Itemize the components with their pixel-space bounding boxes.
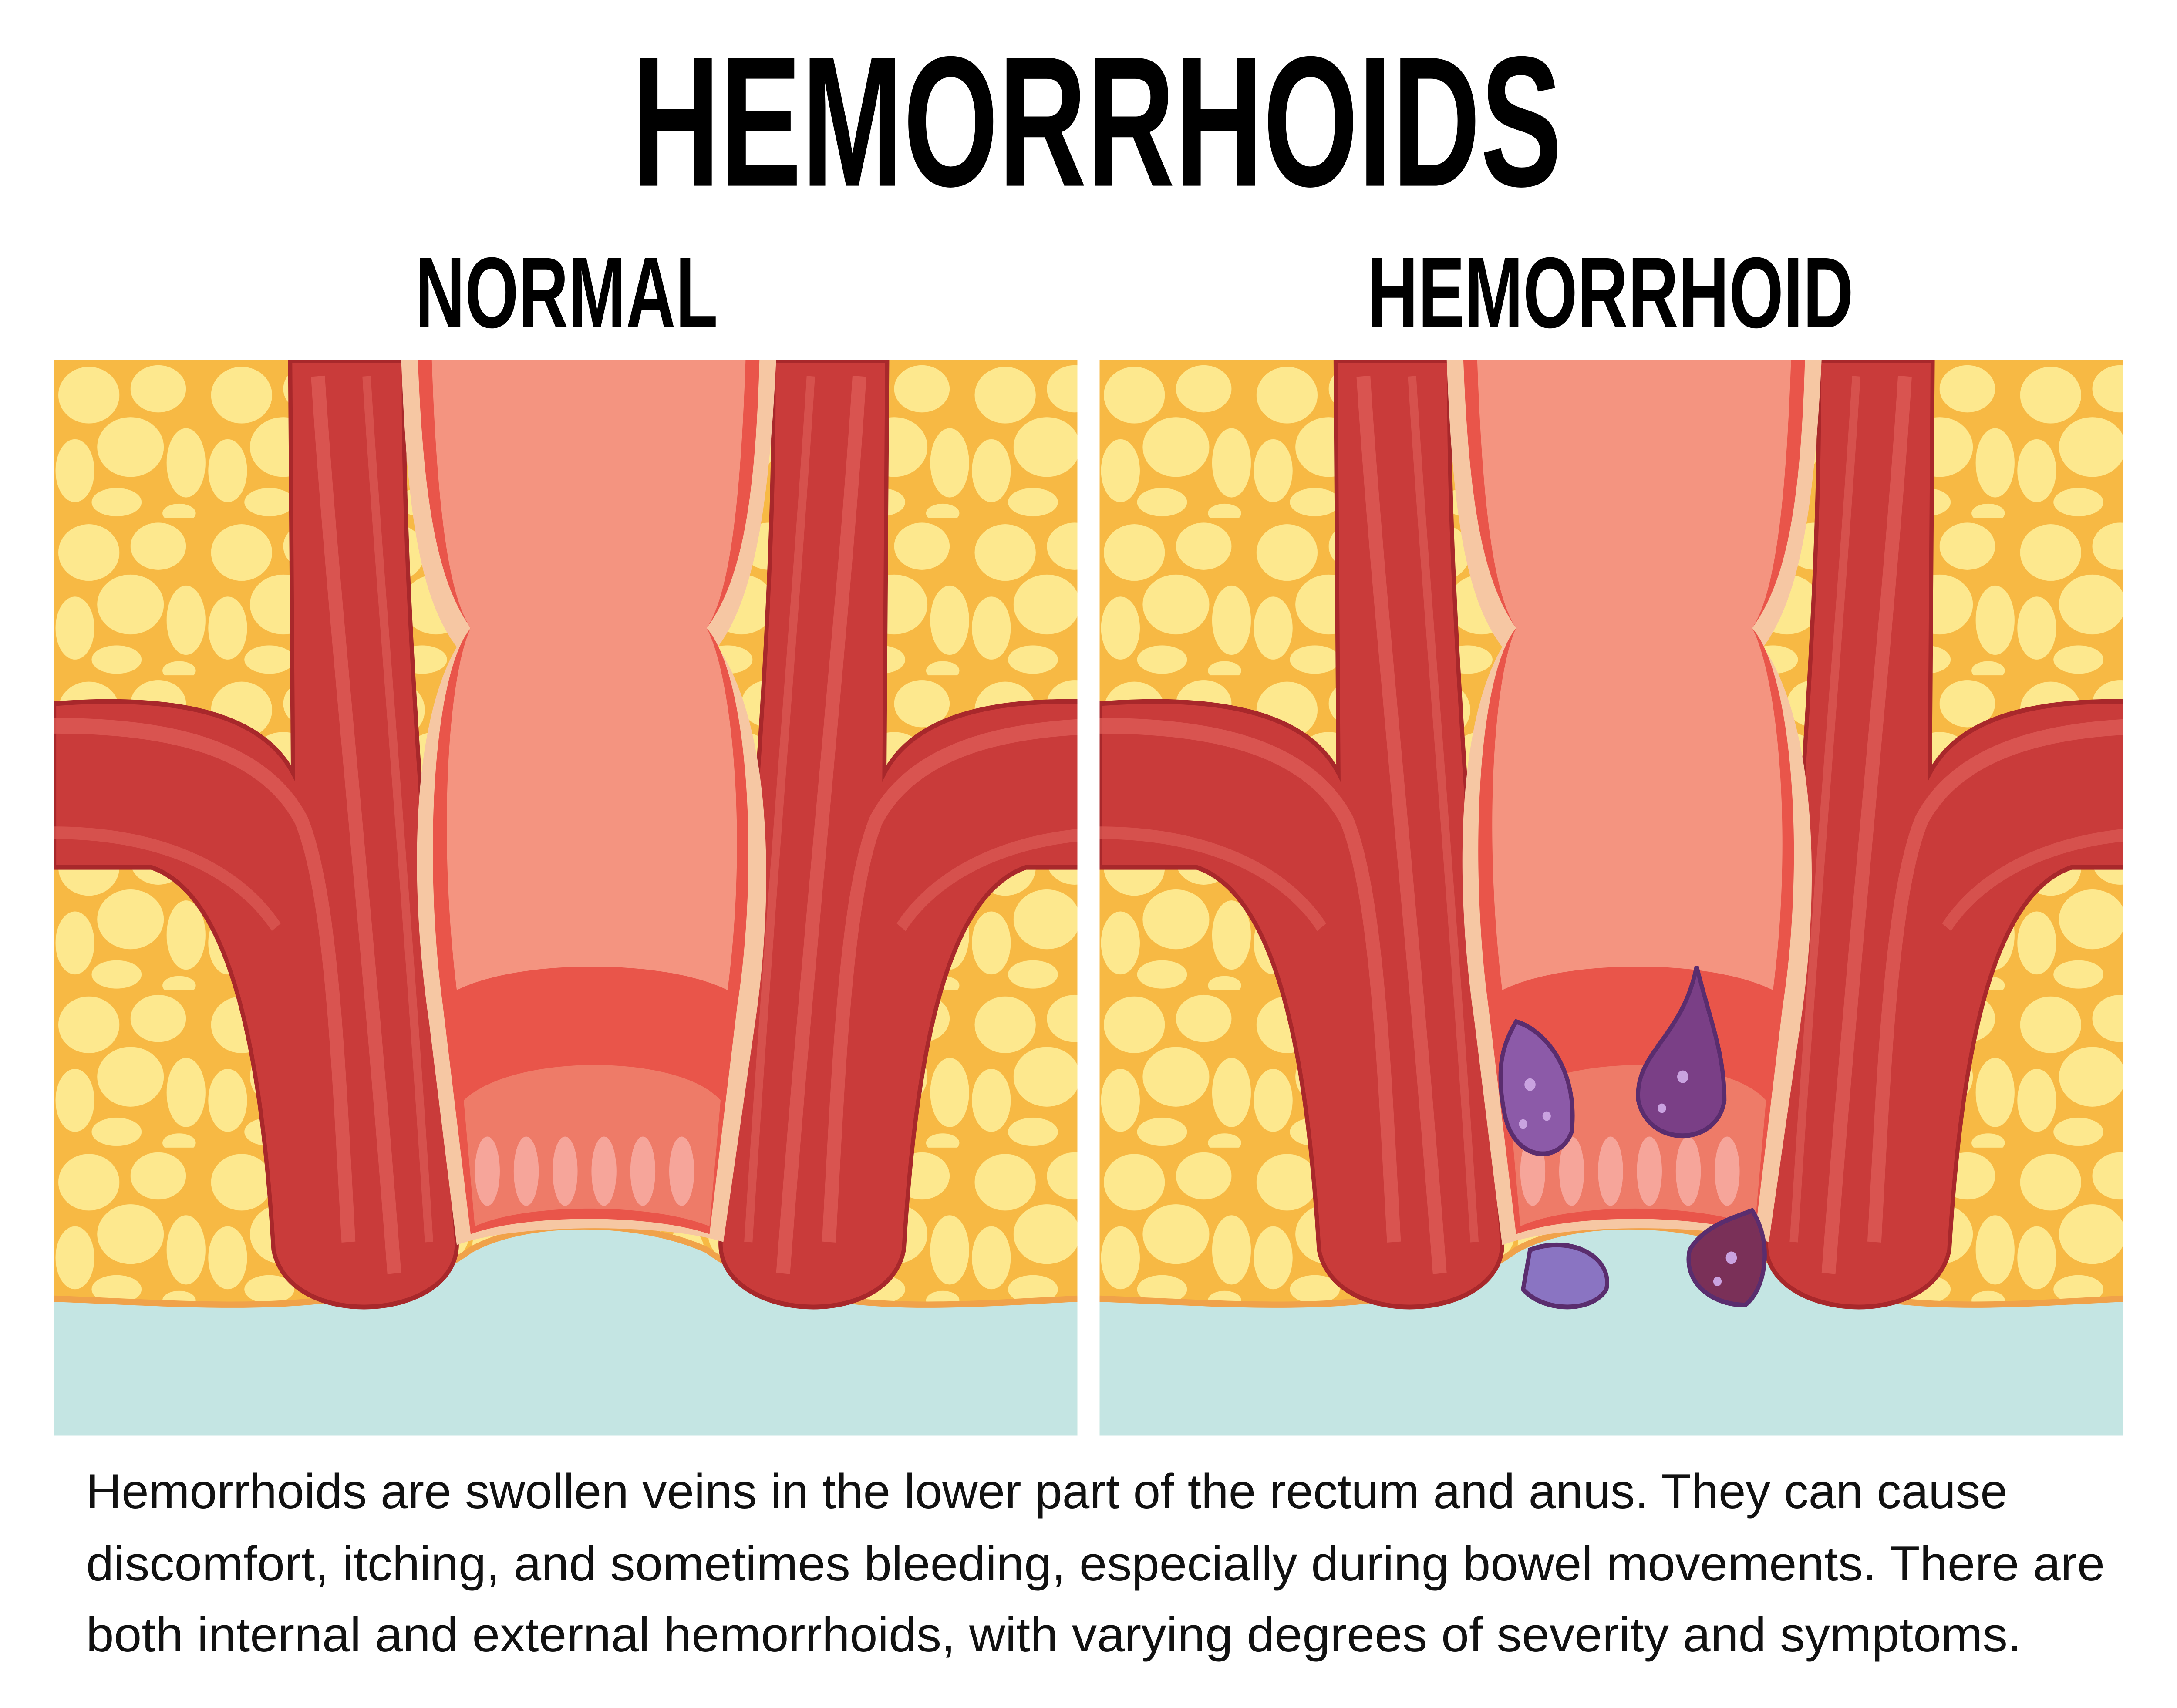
description text [86,1464,2105,1662]
panel: normal [54,360,1123,1447]
description text: discomfort, itching, and sometimes bleeding, especially during bowel movements. There are [86,1536,2105,1591]
description text: both internal and external hemorrhoids, with varying degrees of severity and symptoms. [86,1607,2022,1662]
title: HEMORRHOIDS [632,18,1562,226]
hemorrhoid blobs [1500,967,1765,1307]
description text: Hemorrhoids are swollen veins in the lower part of the rectum and anus. They can cause [86,1464,2008,1519]
heading: normal: NORMAL [415,236,718,349]
heading: hemorrhoid: HEMORRHOID [1368,236,1853,349]
panel: hemorrhoid [1100,360,2169,1447]
